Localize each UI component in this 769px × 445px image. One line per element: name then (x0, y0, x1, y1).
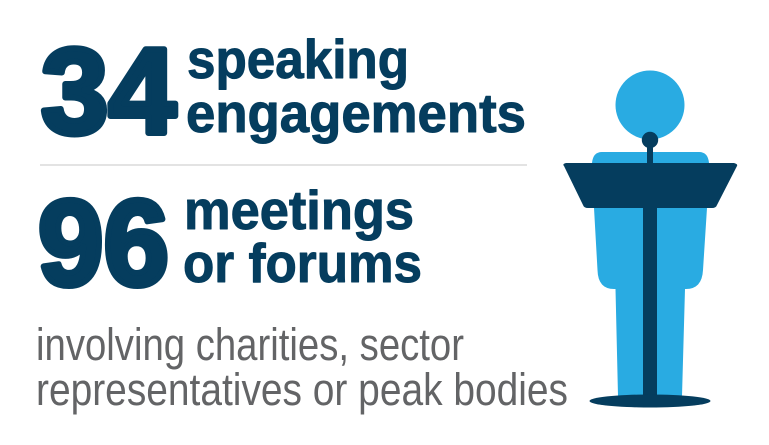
label: speaking engagements: engagements (186, 82, 526, 144)
label: meetings or forums: meetings (184, 179, 414, 241)
label: speaking engagements (186, 28, 526, 144)
lectern post (643, 207, 657, 397)
statistic: 34 speaking engagements (41, 23, 526, 159)
description text: representatives or peak bodies (36, 364, 568, 415)
description text: involving charities, sector (36, 319, 464, 370)
label: meetings or forums (183, 179, 422, 294)
description text (36, 319, 568, 415)
lectern base (590, 394, 710, 408)
number 34: 34 (41, 23, 176, 159)
number 96: 96 (38, 175, 169, 311)
speaker body (592, 152, 709, 396)
label: meetings or forums: or forums (183, 232, 422, 294)
lectern top (563, 163, 737, 208)
icon: speaker at podium (563, 70, 737, 408)
speaker head (616, 70, 684, 140)
statistic: 96 meetings or forums (38, 175, 422, 311)
label: speaking engagements: speaking (187, 28, 409, 90)
microphone (642, 132, 658, 165)
